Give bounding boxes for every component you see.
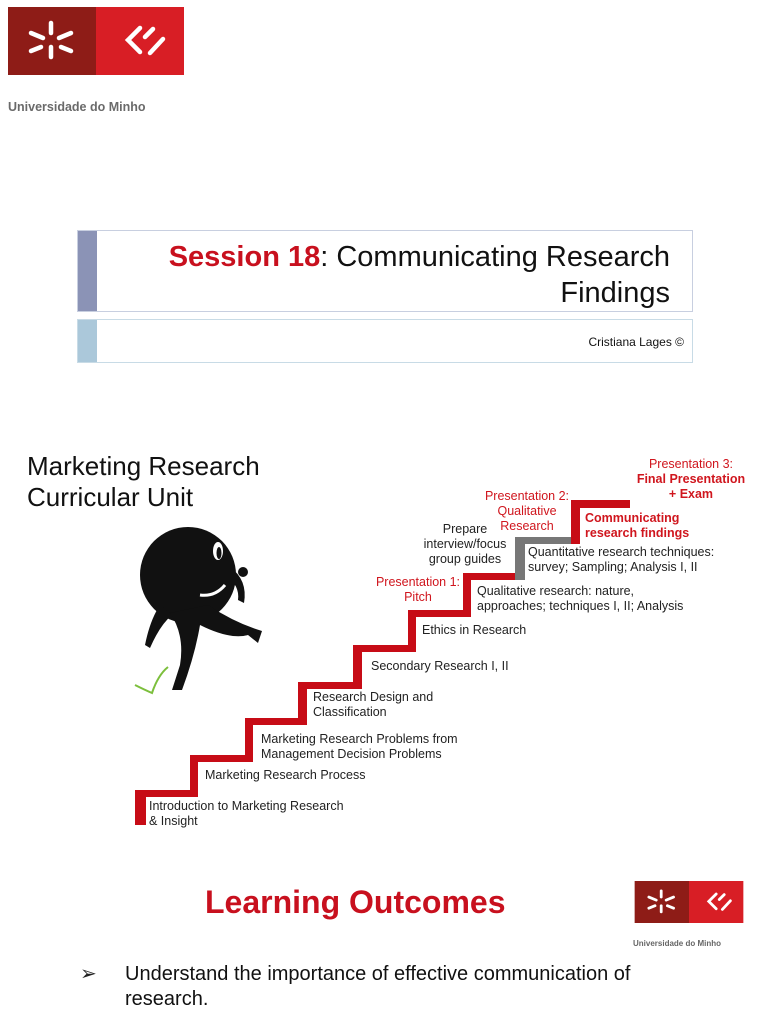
text: + Exam <box>669 487 713 501</box>
text: Ethics in Research <box>422 623 526 637</box>
bullet: outcome: research. <box>125 988 208 1010</box>
logo: bottom <box>633 881 744 948</box>
text: Prepare <box>443 522 487 536</box>
logo: top: Universidade do Minho <box>8 100 146 114</box>
text: approaches; techniques I, II; Analysis <box>477 599 683 613</box>
step labels <box>149 799 344 828</box>
heading: curricular unit: Marketing Research <box>27 451 260 481</box>
step labels: & Insight <box>149 814 198 828</box>
heading: learning outcomes: Learning Outcomes <box>205 884 506 920</box>
text: Presentation 3: <box>649 457 733 471</box>
text: Secondary Research I, II <box>371 659 509 673</box>
heading: curricular unit: Curricular Unit <box>27 482 193 512</box>
logo: bottom: Universidade do Minho <box>633 939 721 948</box>
bullet: outcome: ➢ <box>80 963 97 985</box>
text: Presentation 1: <box>376 575 460 589</box>
logo: top <box>8 7 184 114</box>
step labels: Introduction to Marketing Research <box>149 799 344 813</box>
icon: running character <box>134 527 262 694</box>
text: group guides <box>429 552 501 566</box>
title box <box>77 230 693 312</box>
bullet: outcome: Understand the importance of effective communication of <box>125 963 630 985</box>
text: Marketing Research Problems from <box>261 732 458 746</box>
heading: curricular unit <box>27 451 260 512</box>
text: research findings <box>585 526 689 540</box>
text: Final Presentation <box>637 472 745 486</box>
text: Communicating <box>585 511 679 525</box>
text: Research Design and <box>313 690 433 704</box>
author box <box>77 319 693 363</box>
text: survey; Sampling; Analysis I, II <box>528 560 698 574</box>
text: Presentation 2: <box>485 489 569 503</box>
title box: Session 18: Communicating Research <box>169 241 670 273</box>
text: Qualitative research: nature, <box>477 584 634 598</box>
text: Quantitative research techniques: <box>528 545 714 559</box>
text: interview/focus <box>424 537 506 551</box>
text: Qualitative <box>497 504 557 518</box>
text: Classification <box>313 705 387 719</box>
author box: Cristiana Lages © <box>588 335 684 349</box>
text: Pitch <box>404 590 432 604</box>
text: Research <box>500 519 554 533</box>
title box: Findings <box>560 277 670 309</box>
text: Management Decision Problems <box>261 747 442 761</box>
bullet: outcome <box>80 963 630 1010</box>
text: Marketing Research Process <box>205 768 365 782</box>
